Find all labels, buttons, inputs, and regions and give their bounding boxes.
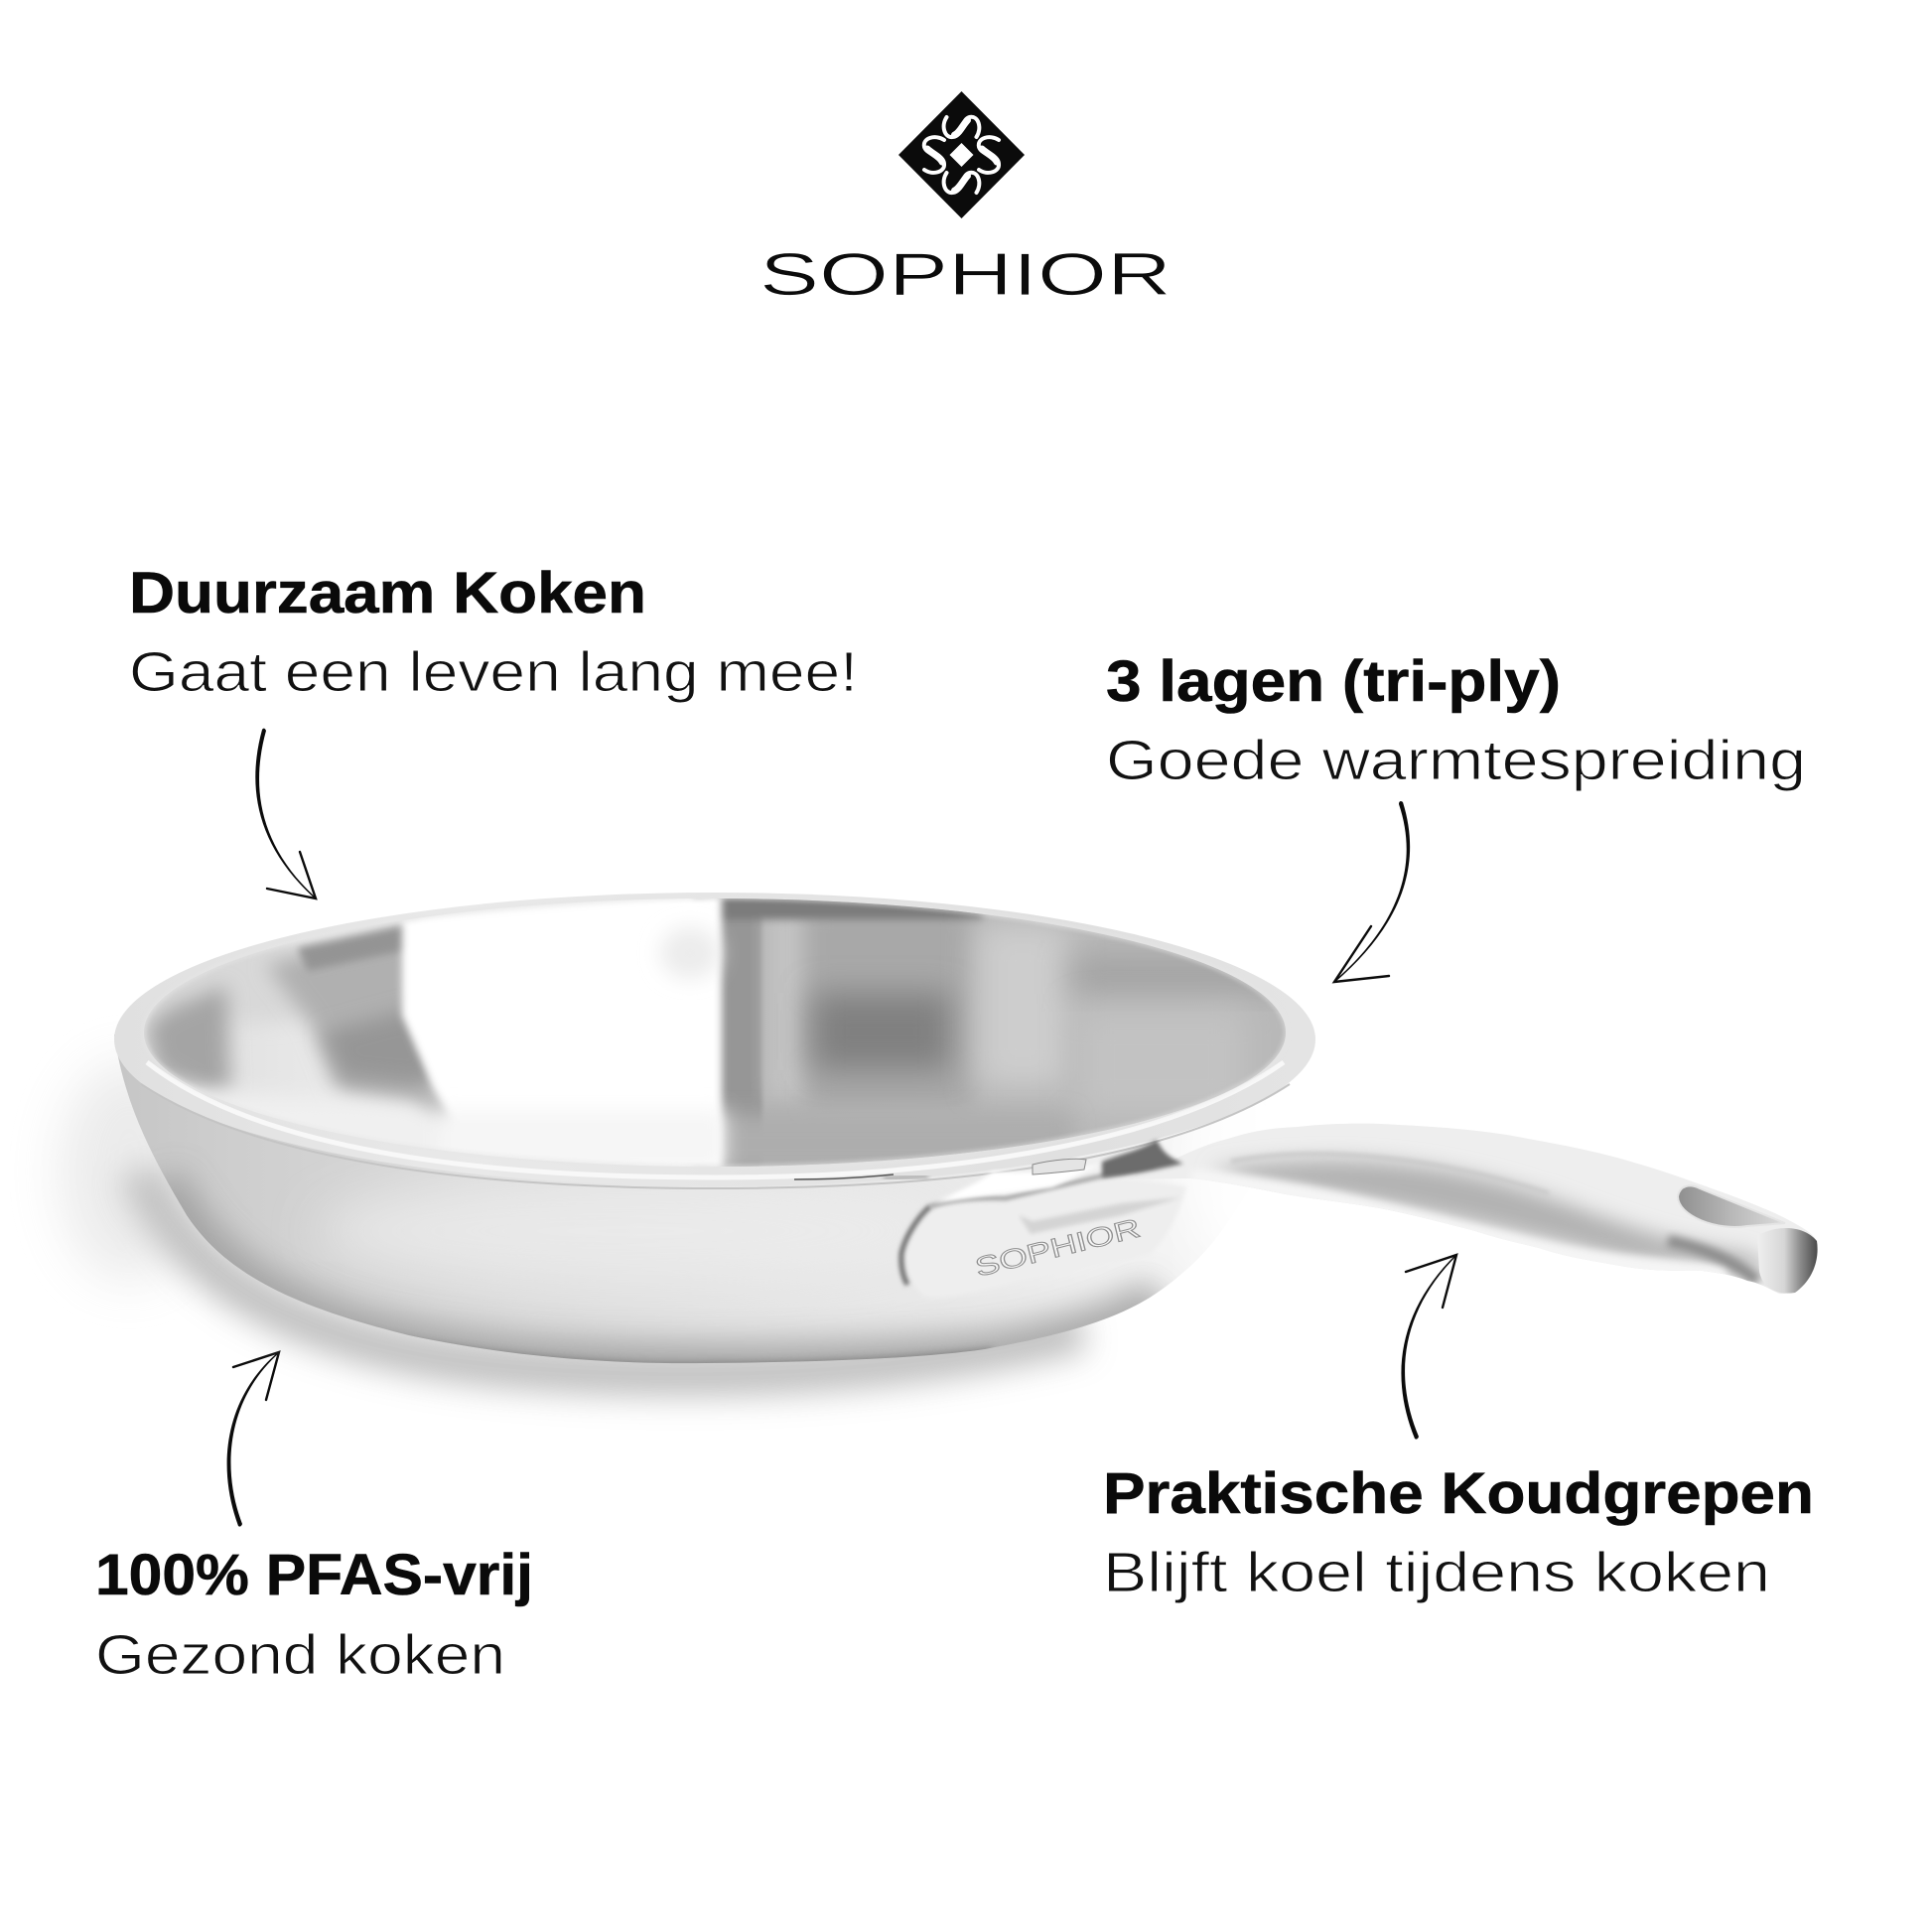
logo wordmark: SOPHIOR (759, 241, 1172, 308)
handle engraving: SOPHIOR (972, 1213, 1143, 1283)
icon: ornamental diamond (898, 91, 1025, 218)
arrow: to rim (255, 729, 316, 899)
pan interior (139, 894, 1301, 1173)
interior: left centre dark patch (266, 923, 467, 1122)
callout: Duurzaam Koken: Gaat een leven lang mee! (129, 640, 858, 704)
interior: bottom left glow (187, 1080, 432, 1124)
callout: Praktische Koudgrepen (1103, 1461, 1814, 1604)
arrow: to handle (1401, 1255, 1457, 1440)
handle hole (1678, 1185, 1785, 1227)
pan shadow (60, 1062, 1082, 1374)
pan body (114, 1035, 1195, 1364)
callout: Duurzaam Koken (129, 561, 858, 704)
callout: 100% PFAS-vrij: Gezond koken (95, 1623, 505, 1687)
interior: upper shade (183, 949, 296, 1019)
pan interior edge (144, 898, 1286, 1167)
callout: Duurzaam Koken: Duurzaam Koken (129, 561, 646, 625)
pan (60, 893, 1827, 1374)
callout: Praktische Koudgrepen: Blijft koel tijdens koken (1103, 1541, 1770, 1604)
callout: 3 lagen (tri-ply): 3 lagen (tri-ply) (1106, 649, 1561, 714)
callout: 100% PFAS-vrij (95, 1543, 533, 1687)
arrow: to base (227, 1352, 280, 1527)
callout: Praktische Koudgrepen: Praktische Koudgrepen (1103, 1461, 1814, 1526)
pan handle (1166, 1124, 1818, 1294)
logo: Sophior (759, 91, 1172, 308)
interior: right bands (717, 917, 763, 1120)
callout: 3 lagen (tri-ply) (1106, 649, 1806, 792)
handle rivet plate (901, 1140, 1186, 1298)
handle tip (1757, 1228, 1818, 1294)
arrow: to pan layers (1334, 801, 1410, 983)
interior: left dark patch (147, 986, 230, 1092)
callout: 3 lagen (tri-ply): Goede warmtespreiding (1106, 729, 1806, 792)
pan rim (114, 893, 1315, 1188)
interior: white highlight (402, 894, 722, 1170)
infographic: Sophior frying pan (56, 91, 1818, 1674)
callout: 100% PFAS-vrij: 100% PFAS-vrij (95, 1543, 533, 1607)
